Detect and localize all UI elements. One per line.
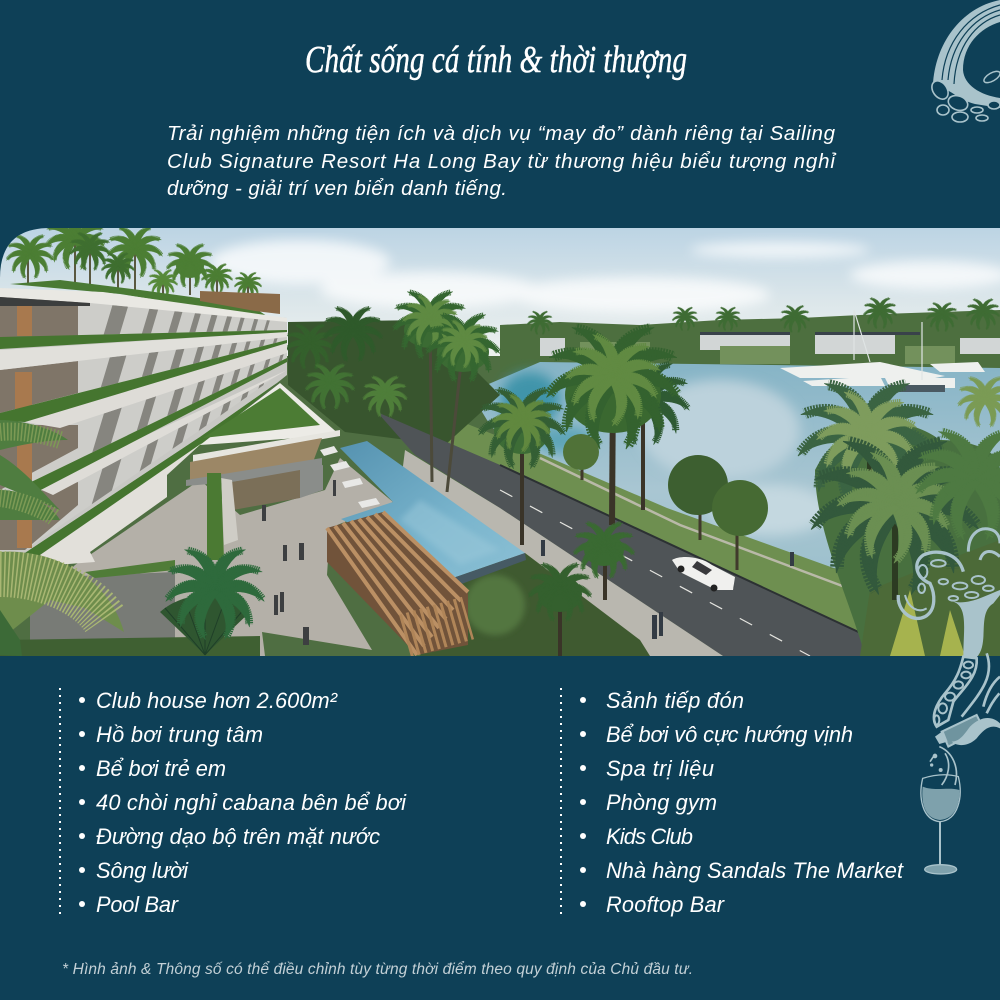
wine bottle bbox=[935, 715, 1000, 747]
amenities list right: Rooftop Bar bbox=[606, 892, 725, 917]
distant shoreline trees and villas bbox=[500, 297, 1000, 364]
short roadside palms bbox=[465, 517, 635, 656]
photo: resort aerial view bbox=[0, 210, 1000, 656]
amenities list right: Bể bơi vô cực hướng vịnh bbox=[606, 722, 853, 747]
level 4 wall with recessed bays bbox=[0, 383, 264, 550]
icon: octopus tentacles, bottle and wine glass bbox=[898, 529, 1000, 874]
amenities list right: Spa trị liệu bbox=[606, 756, 714, 781]
tentacle body bbox=[953, 590, 1000, 657]
amenities list right: Sảnh tiếp đón bbox=[606, 688, 744, 713]
level 2 wall with recessed bays bbox=[0, 338, 278, 413]
footnote: * Hình ảnh & Thông số có thể điều chỉnh tùy từng thời điểm theo quy định của Chủ đầu tư. bbox=[62, 961, 693, 978]
intro paragraph: dưỡng - giải trí ven biển danh tiếng. bbox=[167, 177, 507, 200]
pedestrians bbox=[541, 540, 794, 639]
sidewalk bbox=[400, 450, 723, 656]
clouds bbox=[210, 240, 1000, 313]
road bbox=[380, 414, 862, 656]
amenities list right: Kids Club bbox=[606, 824, 693, 849]
intro paragraph: Trải nghiệm những tiện ích và dịch vụ “may đo” dành riêng tại Sailing bbox=[167, 122, 836, 145]
amenities list left: Bể bơi trẻ em bbox=[96, 756, 226, 781]
wine splash bbox=[930, 747, 956, 785]
lower white podium bbox=[40, 443, 202, 565]
dotted divider left bbox=[59, 688, 61, 918]
slab 2 bbox=[0, 332, 287, 370]
pool bbox=[340, 441, 526, 586]
intro paragraph bbox=[167, 122, 836, 200]
foreground palm right bbox=[796, 371, 1000, 656]
tentacle right bbox=[962, 653, 1000, 717]
roof slab bbox=[0, 288, 287, 322]
sun loungers bbox=[320, 446, 380, 508]
road markings bbox=[500, 490, 810, 656]
timber columns bbox=[15, 306, 32, 548]
green planters bbox=[0, 330, 287, 555]
clubhouse ground floor bbox=[232, 470, 300, 510]
amenities list left: 40 chòi nghỉ cabana bên bể bơi bbox=[96, 790, 407, 815]
intro paragraph: Club Signature Resort Ha Long Bay từ thương hiệu biểu tượng nghỉ bbox=[167, 150, 836, 173]
bank vegetation bbox=[448, 424, 857, 630]
lawn bottom bbox=[0, 636, 260, 656]
water highlights bbox=[500, 372, 830, 535]
sky bbox=[0, 228, 1000, 358]
terrace people bbox=[262, 480, 336, 645]
ground base bbox=[13, 356, 723, 656]
green garden behind pool bbox=[288, 320, 500, 445]
amenities list left: Club house hơn 2.600m² bbox=[96, 688, 338, 713]
clubhouse side wall bbox=[300, 465, 323, 498]
low hedge bbox=[85, 560, 175, 578]
amenities list right: Nhà hàng Sandals The Market bbox=[606, 858, 904, 883]
tentacle sucker chain bbox=[934, 657, 977, 727]
building base bbox=[0, 288, 287, 553]
amenities list right: Phòng gym bbox=[606, 790, 717, 815]
rooftop hedge and timber screen bbox=[10, 280, 280, 318]
pergola bbox=[327, 512, 468, 655]
icon: octopus tentacle top right bbox=[929, 0, 1000, 122]
marina boats bbox=[780, 310, 985, 392]
amenities list left: Sông lười bbox=[96, 858, 189, 883]
clubhouse canopy bbox=[193, 430, 340, 462]
garden beside road bbox=[420, 553, 650, 656]
amenities list left: Pool Bar bbox=[96, 892, 179, 917]
dotted divider right bbox=[560, 688, 562, 918]
rooftop palms bbox=[6, 228, 262, 295]
green roof over clubhouse bbox=[200, 383, 340, 445]
slab 4 bbox=[35, 370, 287, 495]
hotel building bbox=[0, 288, 287, 555]
level 1 wall with recessed bays bbox=[0, 297, 270, 337]
central hedge bbox=[207, 473, 224, 560]
slab 3 bbox=[25, 343, 287, 428]
amenities list right bbox=[580, 688, 904, 917]
terrace paving bbox=[72, 458, 393, 656]
foreground palm left bbox=[0, 420, 124, 656]
lakeside walkway bbox=[540, 458, 853, 590]
lower wall bbox=[30, 572, 175, 640]
amenities list left: Hồ bơi trung tâm bbox=[96, 722, 263, 747]
round trees bbox=[563, 434, 768, 570]
mid-ground palms bbox=[285, 285, 691, 545]
level 3 wall with recessed bays bbox=[0, 354, 284, 490]
banana and fan palm bbox=[160, 541, 266, 655]
amenities list left bbox=[79, 688, 407, 917]
clubhouse upper level bbox=[190, 438, 322, 480]
water bbox=[482, 362, 1000, 569]
clubhouse slab bbox=[186, 458, 322, 486]
amenities list left: Đường dạo bộ trên mặt nước bbox=[96, 824, 380, 849]
ramp bbox=[221, 478, 238, 545]
tentacle curl left bbox=[898, 552, 994, 618]
tentacle loop bbox=[968, 529, 1000, 560]
car bbox=[672, 557, 735, 592]
wine glass bbox=[921, 775, 960, 874]
title: Chất sống cá tính & thời thượng bbox=[305, 39, 687, 81]
